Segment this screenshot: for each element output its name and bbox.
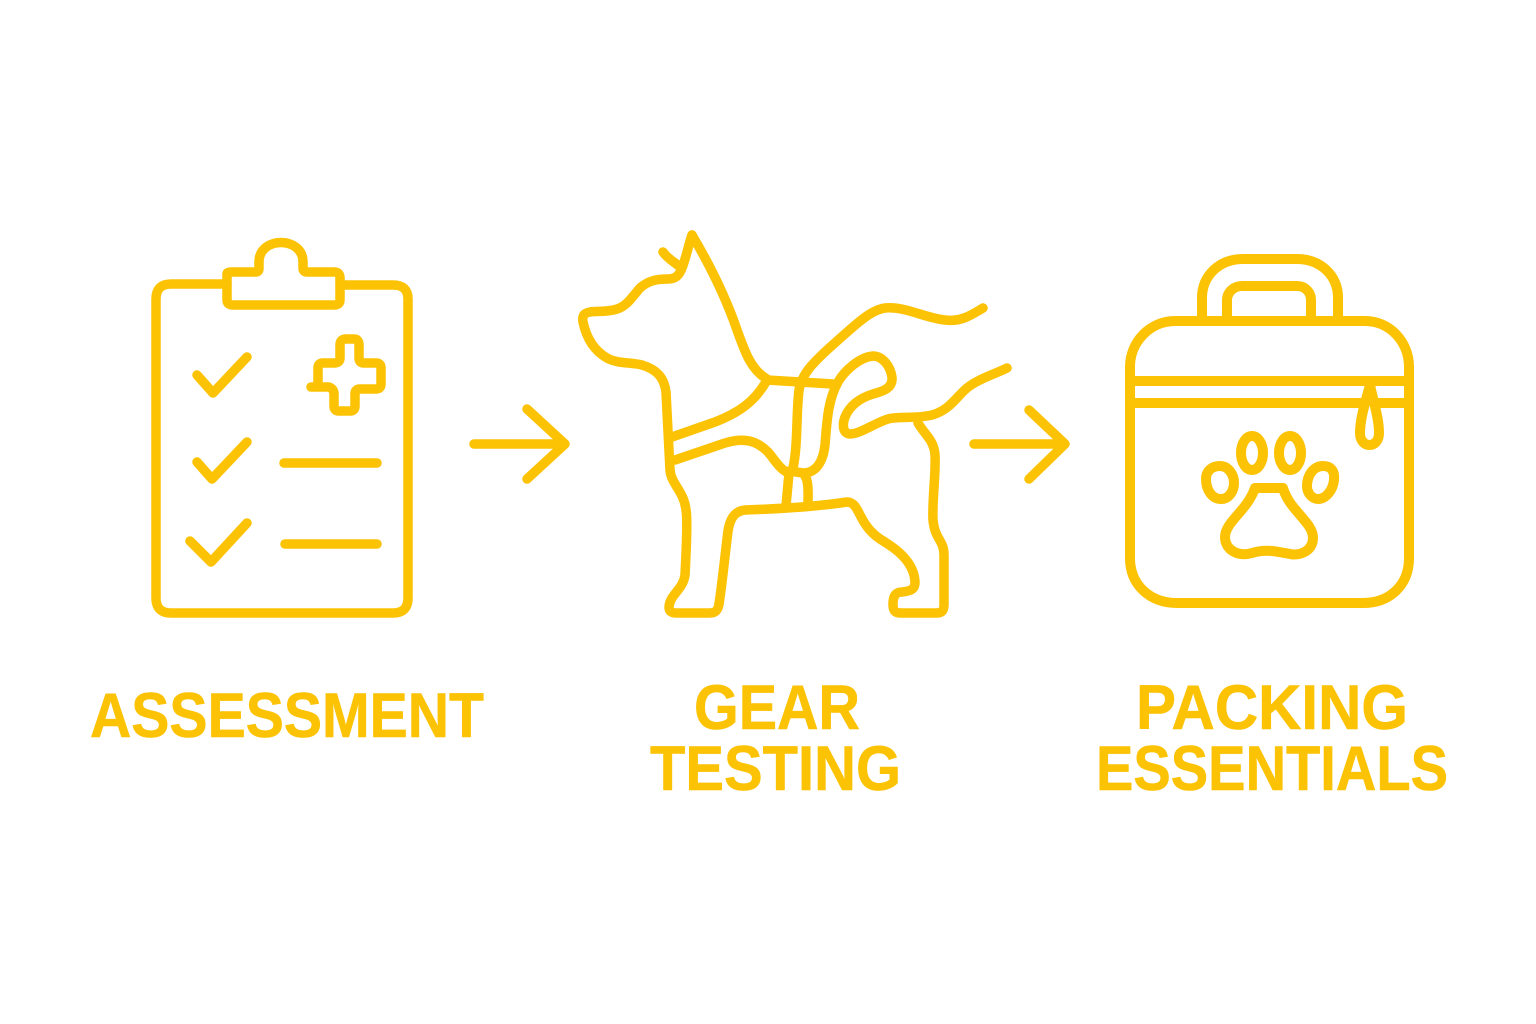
label: packing: PACKING [1136, 673, 1408, 743]
label: testing: TESTING [650, 734, 901, 804]
medical cross [311, 339, 381, 411]
label: gear: GEAR [694, 673, 860, 743]
third check mark [190, 523, 247, 562]
icon: travel bag with paw [1130, 259, 1409, 603]
harness rear strap [805, 476, 808, 505]
arrow: assessment to gear testing [474, 409, 565, 479]
label: essentials: ESSENTIALS [1096, 734, 1448, 804]
dog front body and legs [583, 235, 944, 613]
zipper lines [1132, 381, 1407, 403]
dog back of head [692, 235, 767, 379]
bag body [1130, 321, 1409, 603]
label: assessment: ASSESSMENT [90, 681, 484, 751]
harness top strap [767, 380, 833, 384]
icon: clipboard [156, 242, 408, 613]
second check mark [197, 442, 247, 479]
paw toe 4 [1307, 466, 1334, 499]
clipboard clip [227, 242, 340, 305]
second line [285, 539, 377, 549]
harness belly strap [675, 440, 789, 506]
paw toe 2 [1241, 436, 1263, 470]
bag outer handle [1202, 259, 1338, 318]
first check mark [197, 357, 247, 393]
dog tail and hind [790, 356, 1007, 473]
dog back [793, 308, 983, 468]
harness chest strap [672, 380, 767, 437]
dog far ear [663, 252, 679, 266]
paw toe 3 [1279, 436, 1301, 470]
paw toe 1 [1206, 466, 1234, 499]
clipboard board [156, 284, 408, 613]
icon: dog in harness [583, 235, 1007, 613]
zipper pull [1360, 385, 1379, 445]
bag inner handle [1227, 286, 1311, 318]
first line [284, 458, 377, 468]
arrow: gear testing to packing essentials [974, 410, 1065, 479]
paw pad [1225, 488, 1313, 554]
